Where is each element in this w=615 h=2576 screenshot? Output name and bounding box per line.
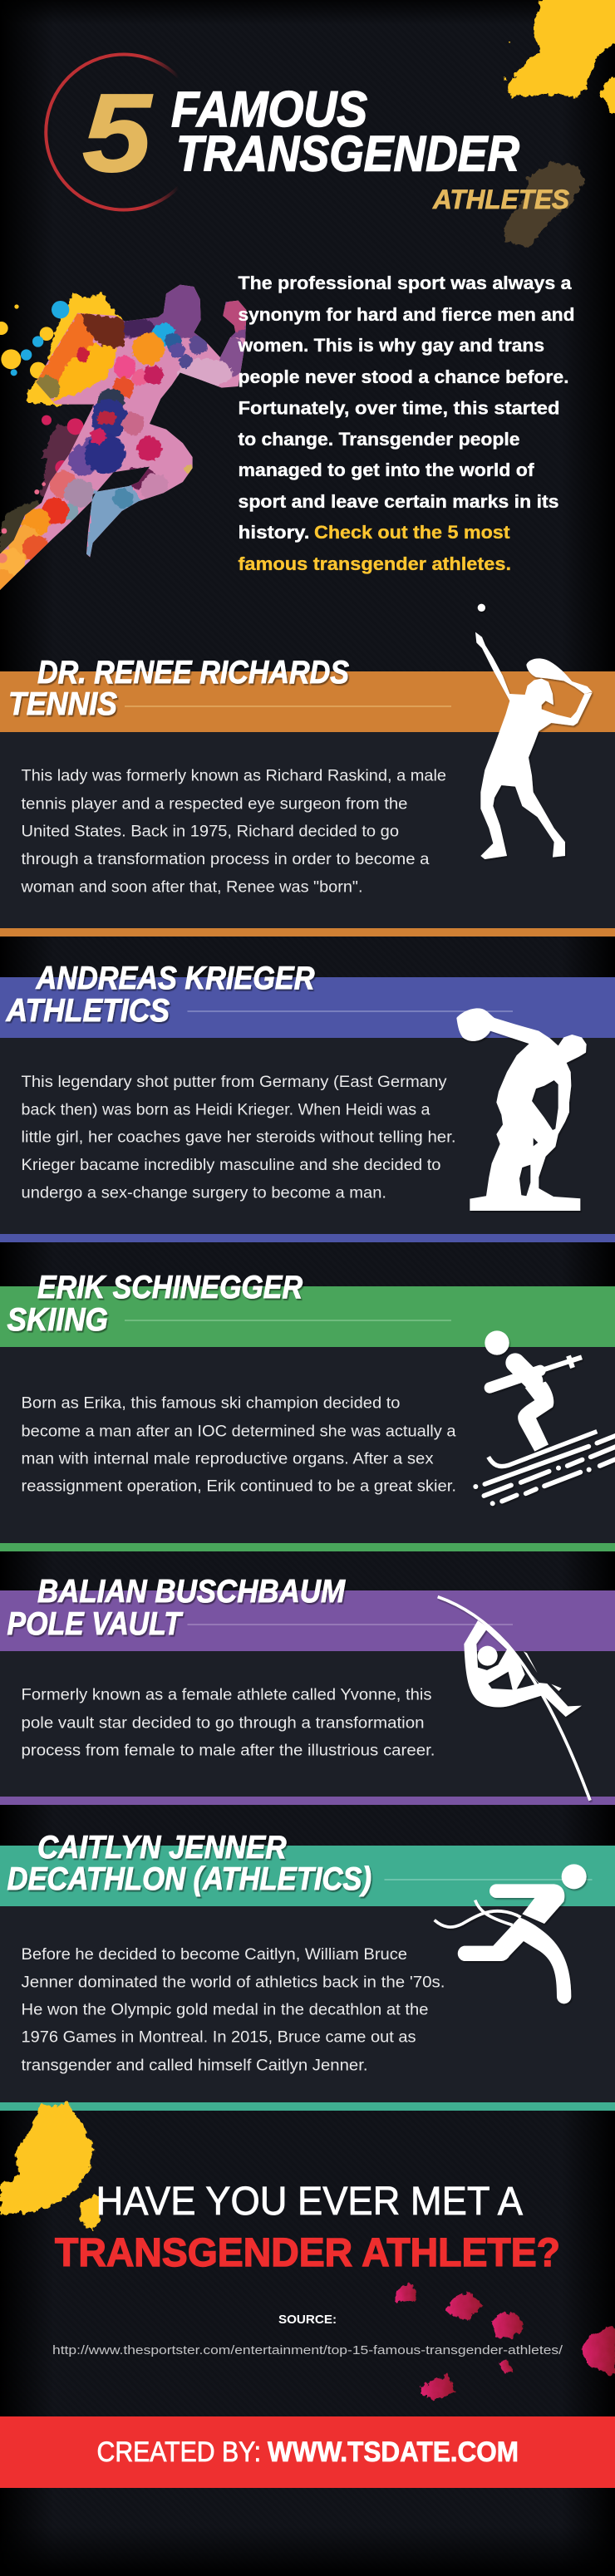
- body text: [22, 1946, 445, 2075]
- source credit: [52, 2313, 563, 2357]
- heading: name and sport: SKIING: [7, 1302, 108, 1338]
- body text: [22, 1074, 455, 1202]
- heading: name and sport: [7, 1830, 371, 1897]
- icon: tennis player: [475, 604, 593, 859]
- title line transgender: TRANSGENDER: [176, 126, 519, 181]
- brown paint splash: [504, 164, 584, 248]
- yellow paint splash bottom left: [0, 2104, 103, 2231]
- icon: sprinter crossing finish tape: [435, 1864, 587, 2003]
- body text: This legendary shot putter from Germany (East Germany: [22, 1074, 447, 1091]
- body text: man with internal male reproductive organs. After a sex: [22, 1451, 434, 1468]
- magenta paint splashes: [397, 2284, 615, 2399]
- body text: This lady was formerly known as Richard Raskind, a male: [22, 767, 446, 784]
- icon: discus thrower statue: [456, 1008, 587, 1211]
- heading: name and sport: DECATHLON (ATHLETICS): [7, 1861, 371, 1897]
- intro paragraph: [237, 273, 575, 574]
- body text: [22, 1395, 456, 1496]
- heading: name and sport: DR. RENEE RICHARDS: [37, 655, 349, 691]
- intro paragraph: women. This is why gay and trans: [237, 335, 544, 356]
- intro paragraph: famous transgender athletes.: [238, 553, 511, 574]
- title line famous: FAMOUS: [171, 81, 367, 137]
- body text: Jenner dominated the world of athletics back in the '70s.: [22, 1974, 445, 1991]
- body text: pole vault star decided to go through a transformation: [22, 1715, 424, 1732]
- body text: Krieger bacame incredibly masculine and she decided to: [22, 1157, 440, 1174]
- body text: through a transformation process in order to become a: [22, 851, 430, 868]
- body text: back then) was born as Heidi Krieger. When Heidi was a: [22, 1101, 430, 1118]
- heading: name and sport: CAITLYN JENNER: [37, 1830, 287, 1866]
- icon: pole vaulter: [438, 1597, 590, 1801]
- body text: [20, 767, 446, 897]
- source url: http://www.thesportster.com/entertainment/top-15-famous-transgender-athletes/: [52, 2343, 563, 2357]
- illustration: paint splash runner: [0, 284, 247, 590]
- body text: undergo a sex-change surgery to become a man.: [22, 1184, 386, 1202]
- question line two: TRANSGENDER ATHLETE?: [55, 2231, 560, 2275]
- heading: name and sport: POLE VAULT: [7, 1606, 184, 1642]
- intro paragraph: history.: [238, 522, 309, 543]
- body text: transgender and called himself Caitlyn Jenner.: [22, 2057, 367, 2075]
- question line one: HAVE YOU EVER MET A: [96, 2180, 523, 2224]
- body text: little girl, her coaches gave her steroids without telling her.: [22, 1129, 455, 1147]
- panel: Balian Buschbaum: [0, 1574, 615, 1805]
- closing question: [55, 2180, 560, 2275]
- heading: name and sport: BALIAN BUSCHBAUM: [37, 1574, 346, 1610]
- body text: Born as Erika, this famous ski champion decided to: [22, 1395, 401, 1413]
- body text: woman and soon after that, Renee was "born".: [20, 879, 362, 897]
- website address: WWW.TSDATE.COM: [268, 2436, 519, 2468]
- footer band: [0, 2416, 615, 2488]
- body text: process from female to male after the illustrious career.: [22, 1742, 435, 1760]
- icon: skier: [473, 1330, 615, 1506]
- body text: tennis player and a respected eye surgeon from the: [22, 796, 407, 814]
- title: [46, 55, 570, 214]
- heading: name and sport: [8, 655, 349, 722]
- intro paragraph: synonym for hard and fierce men and: [238, 304, 575, 325]
- body text: United States. Back in 1975, Richard decided to go: [22, 823, 399, 841]
- intro paragraph: to change. Transgender people: [238, 429, 520, 450]
- body text: He won the Olympic gold medal in the decathlon at the: [22, 2002, 429, 2019]
- body text: Before he decided to become Caitlyn, William Bruce: [22, 1946, 407, 1964]
- heading: name and sport: ANDREAS KRIEGER: [36, 961, 315, 996]
- heading: name and sport: [6, 961, 315, 1029]
- panel: Dr. Renee Richards: [0, 604, 615, 937]
- title number 5: 5: [82, 71, 154, 195]
- heading: name and sport: [7, 1574, 346, 1642]
- runner silhouette with colour blobs: [0, 284, 247, 590]
- intro paragraph: managed to get into the world of: [238, 460, 534, 480]
- body text: Formerly known as a female athlete called Yvonne, this: [22, 1687, 432, 1703]
- heading: name and sport: ATHLETICS: [6, 993, 170, 1029]
- yellow paint splash top right: [503, 0, 615, 116]
- created by label: CREATED BY:: [96, 2436, 261, 2468]
- body text: [22, 1687, 435, 1760]
- intro paragraph: sport and leave certain marks in its: [238, 491, 558, 512]
- title line athletes: ATHLETES: [432, 184, 570, 214]
- intro paragraph: The professional sport was always a: [238, 273, 572, 293]
- title circle arc: [46, 55, 179, 209]
- body text: 1976 Games in Montreal. In 2015, Bruce came out as: [22, 2029, 416, 2047]
- intro paragraph: Check out the 5 most: [314, 522, 510, 543]
- source label: SOURCE:: [278, 2313, 337, 2327]
- intro paragraph: Fortunately, over time, this started: [238, 397, 560, 419]
- splashes behind runner: [0, 293, 123, 557]
- heading: name and sport: TENNIS: [8, 686, 117, 722]
- body text: reassignment operation, Erik continued to be a great skier.: [22, 1478, 456, 1496]
- heading: name and sport: ERIK SCHINEGGER: [37, 1270, 303, 1305]
- panel: Erik Schinegger: [0, 1270, 615, 1551]
- panel: Andreas Krieger: [0, 961, 615, 1242]
- intro paragraph: people never stood a chance before.: [238, 366, 568, 387]
- panel: Caitlyn Jenner: [0, 1830, 615, 2111]
- body text: become a man after an IOC determined she was actually a: [22, 1423, 456, 1441]
- heading: name and sport: [7, 1270, 303, 1338]
